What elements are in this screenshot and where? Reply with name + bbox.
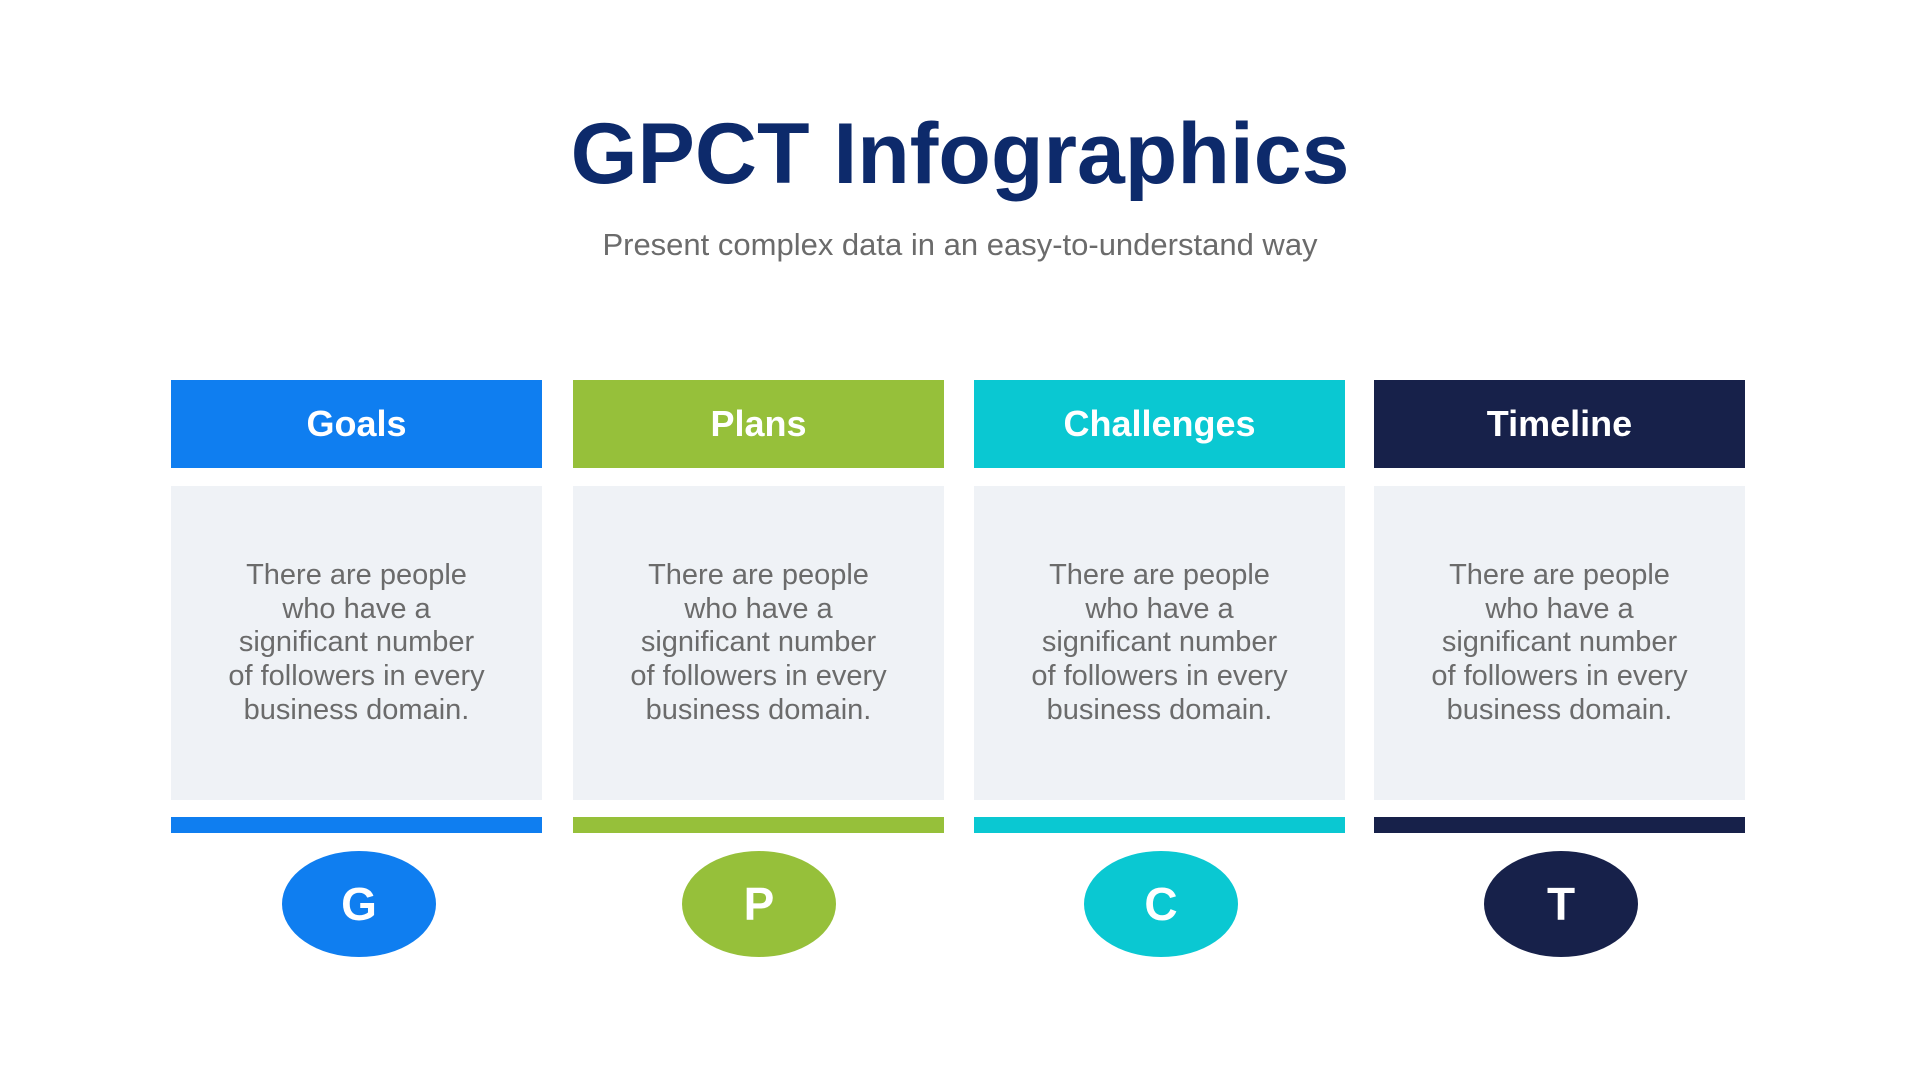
subtitle: Present complex data in an easy-to-understand way [602,227,1318,262]
header: challenges [974,380,1345,468]
text: challenges: business domain. [1047,694,1272,726]
text: goals: who have a [282,593,431,625]
text: plans: who have a [684,593,833,625]
header: goals [171,380,542,468]
text: challenges: significant number [1042,626,1277,658]
header: timeline: Timeline [1487,403,1632,444]
bar: challenges [974,817,1345,833]
panel: challenges [974,380,1345,957]
text: challenges: who have a [1085,593,1234,625]
text: goals: significant number [239,626,474,658]
text: plans [573,486,944,800]
text: timeline: significant number [1442,626,1677,658]
text: challenges: of followers in every [1031,660,1288,692]
icon: C [1084,851,1238,957]
text: timeline: who have a [1485,593,1634,625]
title: GPCT Infographics [571,106,1349,202]
panel: plans [573,380,944,957]
icon: P: P [744,878,774,930]
text: goals: of followers in every [228,660,485,692]
header: challenges: Challenges [1063,403,1256,444]
text: timeline: business domain. [1447,694,1672,726]
header: goals: Goals [306,403,407,444]
header: plans [573,380,944,468]
icon: G: G [341,878,377,930]
text: timeline [1374,486,1745,800]
text: timeline: There are people [1449,559,1670,591]
header: plans: Plans [710,403,807,444]
text: goals: There are people [246,559,467,591]
icon: T: T [1547,878,1575,930]
text: challenges [974,486,1345,800]
text: plans: of followers in every [630,660,887,692]
icon: T [1484,851,1638,957]
panel: goals [171,380,542,957]
bar: plans [573,817,944,833]
bar: goals [171,817,542,833]
text: plans: There are people [648,559,869,591]
icon: P [682,851,836,957]
bar: timeline [1374,817,1745,833]
text: challenges: There are people [1049,559,1270,591]
text: timeline: of followers in every [1431,660,1688,692]
panel: timeline [1374,380,1745,957]
text: goals [171,486,542,800]
text: plans: business domain. [646,694,871,726]
text: plans: significant number [641,626,876,658]
header: timeline [1374,380,1745,468]
text: goals: business domain. [244,694,469,726]
icon: G [282,851,436,957]
icon: C: C [1144,878,1178,930]
